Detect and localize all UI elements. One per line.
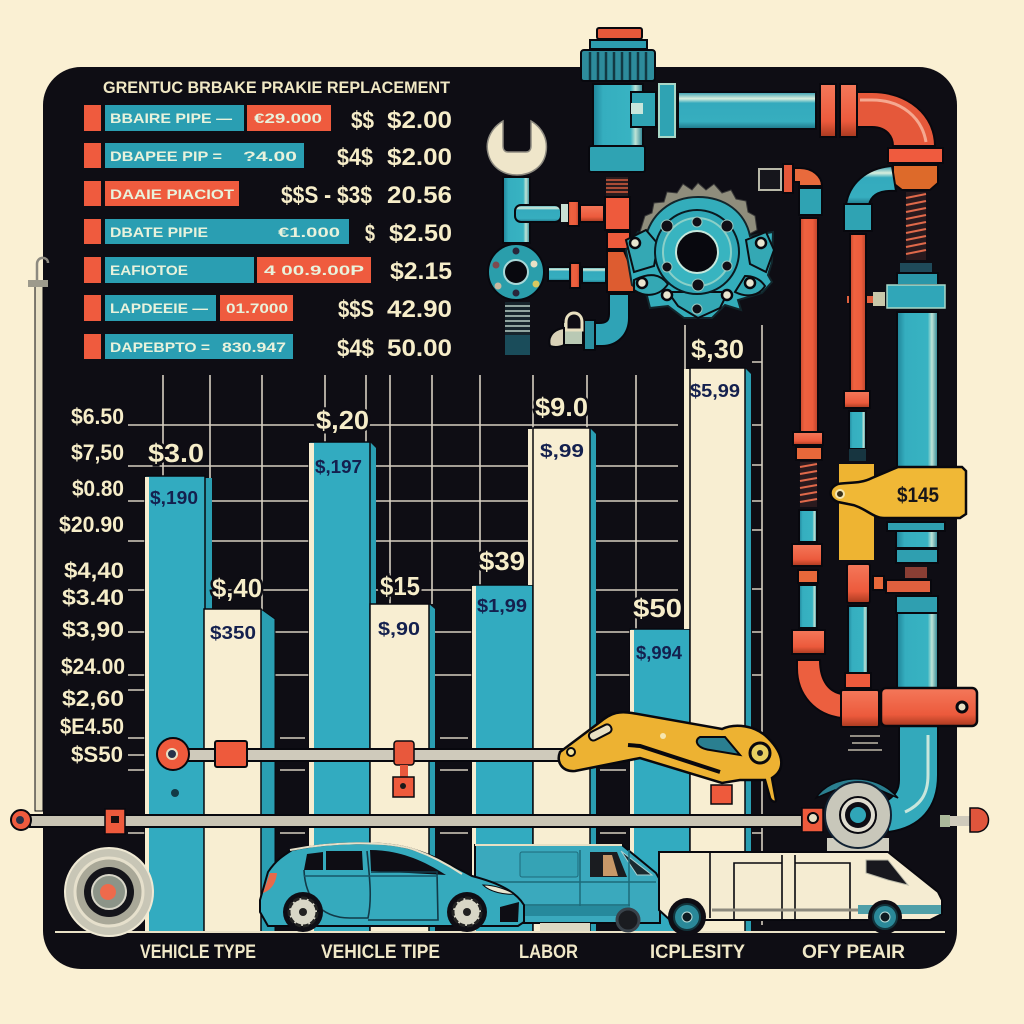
bar: group 3 cream (528, 428, 596, 932)
bar: group 2 cream (370, 604, 435, 932)
icon: wrench head (487, 121, 546, 175)
bar value labels inside: $,197 (315, 457, 362, 477)
row 7: $4$ (337, 335, 375, 362)
horizontal teal pipe (678, 92, 816, 129)
row 6 (84, 295, 452, 323)
y axis labels: $3.40 (62, 585, 124, 610)
row 6: 42.90 (387, 296, 452, 323)
y axis labels: $E4.50 (60, 714, 124, 739)
red clamp bar (841, 688, 977, 750)
y axis labels: $4,40 (64, 558, 124, 583)
gear teeth (640, 183, 757, 260)
row 1: $2.00 (387, 107, 452, 134)
row 1: $$ (351, 107, 375, 134)
bar value labels inside: $,190 (150, 488, 198, 508)
row 1 (84, 105, 452, 134)
row 5: EAFIOTOE (110, 262, 188, 278)
bar value labels above (148, 334, 744, 623)
tag body (830, 467, 966, 518)
row 5: 4 00.9.00P (264, 262, 364, 278)
row 2: $4$ (337, 144, 374, 171)
bar: group 3 teal (472, 585, 533, 932)
y axis labels: $6.50 (71, 404, 124, 429)
van wheels (668, 898, 902, 936)
row 2: DBAPEE PIP = (110, 148, 222, 164)
row 4: €1.000 (278, 224, 340, 240)
bar value labels above: $3.0 (148, 438, 204, 468)
yellow price tag (830, 464, 966, 560)
row 1: BBAIRE PIPE — (110, 110, 232, 126)
y axis labels: $20.90 (59, 512, 124, 537)
white van (659, 852, 942, 936)
red clamp (215, 741, 247, 767)
clamp (105, 809, 125, 834)
van window (866, 860, 908, 885)
icon: gear (626, 183, 774, 318)
category labels (140, 942, 905, 963)
red lower elbow (797, 660, 842, 718)
y axis labels: $7,50 (71, 440, 124, 465)
row 2: $2.00 (387, 144, 452, 171)
row 6: LAPDEEIE — (110, 300, 208, 316)
red elbow (857, 92, 935, 146)
category labels: ICPLESITY (650, 942, 745, 963)
row 4: $2.50 (389, 220, 452, 247)
car door lines (304, 851, 438, 920)
tag hole (836, 490, 844, 498)
category labels: VEHICLE TYPE (140, 942, 256, 963)
bar value labels inside: $,99 (540, 441, 584, 461)
wrench shaft (503, 177, 530, 243)
row 4: $ (365, 220, 375, 247)
clamp under wrench (711, 785, 732, 804)
bar: group 4 teal (630, 629, 690, 932)
row 7: DAPEBPTO = (110, 339, 210, 355)
y axis labels: $2,60 (62, 686, 124, 711)
orange coupling (893, 165, 938, 190)
row 6: $$S (338, 296, 374, 323)
right teal block (847, 263, 945, 308)
upper cross pipe (515, 201, 604, 226)
chart grid (128, 325, 762, 925)
right wheel pulley (802, 779, 898, 854)
row 7: 830.947 (222, 339, 286, 355)
second red pipe (850, 234, 866, 391)
left vertical rod (28, 258, 48, 811)
bar value labels inside: $,90 (378, 619, 420, 639)
main teal pipe upper (897, 312, 938, 468)
y axis labels: $24.00 (61, 654, 125, 679)
van front stripe (858, 905, 941, 914)
teal collar left (844, 204, 872, 231)
main teal pipe lower (887, 522, 945, 832)
row 2: ?4.00 (243, 148, 297, 164)
gear rings (655, 210, 739, 294)
teal elbow (846, 166, 896, 205)
teal lower elbow (549, 294, 629, 350)
left end cap (11, 810, 31, 830)
bar value labels above: $,40 (212, 573, 262, 603)
bar value labels inside (150, 381, 740, 663)
bar value labels inside: $,994 (636, 643, 682, 663)
bar chart (145, 334, 751, 932)
icon: brake disc (65, 848, 153, 936)
bar value labels inside: $350 (210, 623, 256, 643)
bar: group 2 teal (309, 442, 376, 932)
tag price: $145 (897, 484, 939, 507)
elbow highlight (860, 100, 926, 142)
middle elbow (759, 164, 822, 215)
bar value labels above: $,20 (316, 405, 369, 435)
red vertical valve (605, 177, 634, 292)
wrench and small pipes (487, 121, 634, 355)
heading: GRENTUC BRBAKE PRAKIE REPLACEMENT (103, 78, 451, 97)
tag clamp block (839, 464, 874, 560)
bar value labels inside: $5,99 (690, 381, 740, 401)
row 1: €29.000 (254, 110, 322, 126)
right rod end (940, 808, 988, 832)
lower middle pipe column (844, 391, 931, 688)
y axis labels: $S50 (71, 742, 123, 767)
bar: group 4 cream (684, 368, 751, 932)
row 4 (84, 219, 452, 247)
row 3 (84, 181, 452, 209)
row 7 (84, 334, 452, 362)
row 5 (84, 257, 452, 285)
car wheels (283, 892, 487, 932)
lower spring (505, 302, 530, 355)
row 3: DAAIE PIACIOT (110, 186, 235, 202)
panel: dark chart board (43, 67, 957, 969)
red flanges (820, 84, 857, 137)
bar value labels above: $15 (380, 571, 420, 601)
y axis labels: $3,90 (62, 617, 124, 642)
valve body (593, 84, 643, 146)
bar: group 1 teal (145, 476, 212, 932)
red end cap (157, 738, 189, 770)
icon: teal car (260, 843, 524, 932)
bar: group 1 cream (204, 609, 275, 932)
flange (488, 244, 544, 300)
y axis labels (59, 404, 125, 767)
icon: yellow wrench (559, 712, 781, 802)
category labels: LABOR (519, 942, 578, 963)
row 6: 01.7000 (226, 300, 288, 316)
bar value labels above: $50 (633, 593, 682, 623)
gear bolts (630, 238, 766, 300)
row 4: DBATE PIPIE (110, 224, 208, 240)
hanging clamp (393, 741, 414, 797)
lower cross pipe (548, 263, 606, 288)
valve cap (581, 28, 655, 81)
red collar (888, 148, 943, 163)
lower left pipe column (792, 432, 842, 718)
panel: cost table (84, 105, 452, 362)
gear holes (661, 217, 733, 314)
bar value labels above: $9.0 (535, 392, 588, 422)
spring (800, 462, 817, 507)
baseline (55, 931, 945, 933)
row 3: 20.56 (387, 182, 452, 209)
van side panels (710, 853, 850, 920)
row 5: $2.15 (390, 258, 452, 285)
upper lever rod (157, 738, 565, 797)
car headlight (483, 885, 514, 894)
car tail light (263, 873, 277, 893)
bar value labels above: $,30 (691, 334, 744, 364)
y axis labels: $0.80 (72, 476, 124, 501)
gear lugs (626, 230, 774, 318)
row 7: 50.00 (387, 335, 452, 362)
car windows (304, 850, 446, 875)
row 2 (84, 143, 452, 171)
teal van (475, 845, 660, 931)
upper right spring (906, 192, 926, 260)
top pipe assembly (581, 28, 945, 468)
lower long rod (11, 785, 802, 834)
long red pipe (800, 218, 818, 432)
gear body (626, 197, 773, 318)
valve collar (589, 146, 645, 172)
row 3: $$S - $3$ (281, 182, 373, 209)
nozzle and flange (631, 84, 675, 137)
bar value labels above: $39 (479, 546, 525, 576)
category labels: VEHICLE TIPE (321, 942, 440, 963)
category labels: OFY PEAIR (802, 942, 905, 963)
bar value labels inside: $1,99 (477, 596, 527, 616)
